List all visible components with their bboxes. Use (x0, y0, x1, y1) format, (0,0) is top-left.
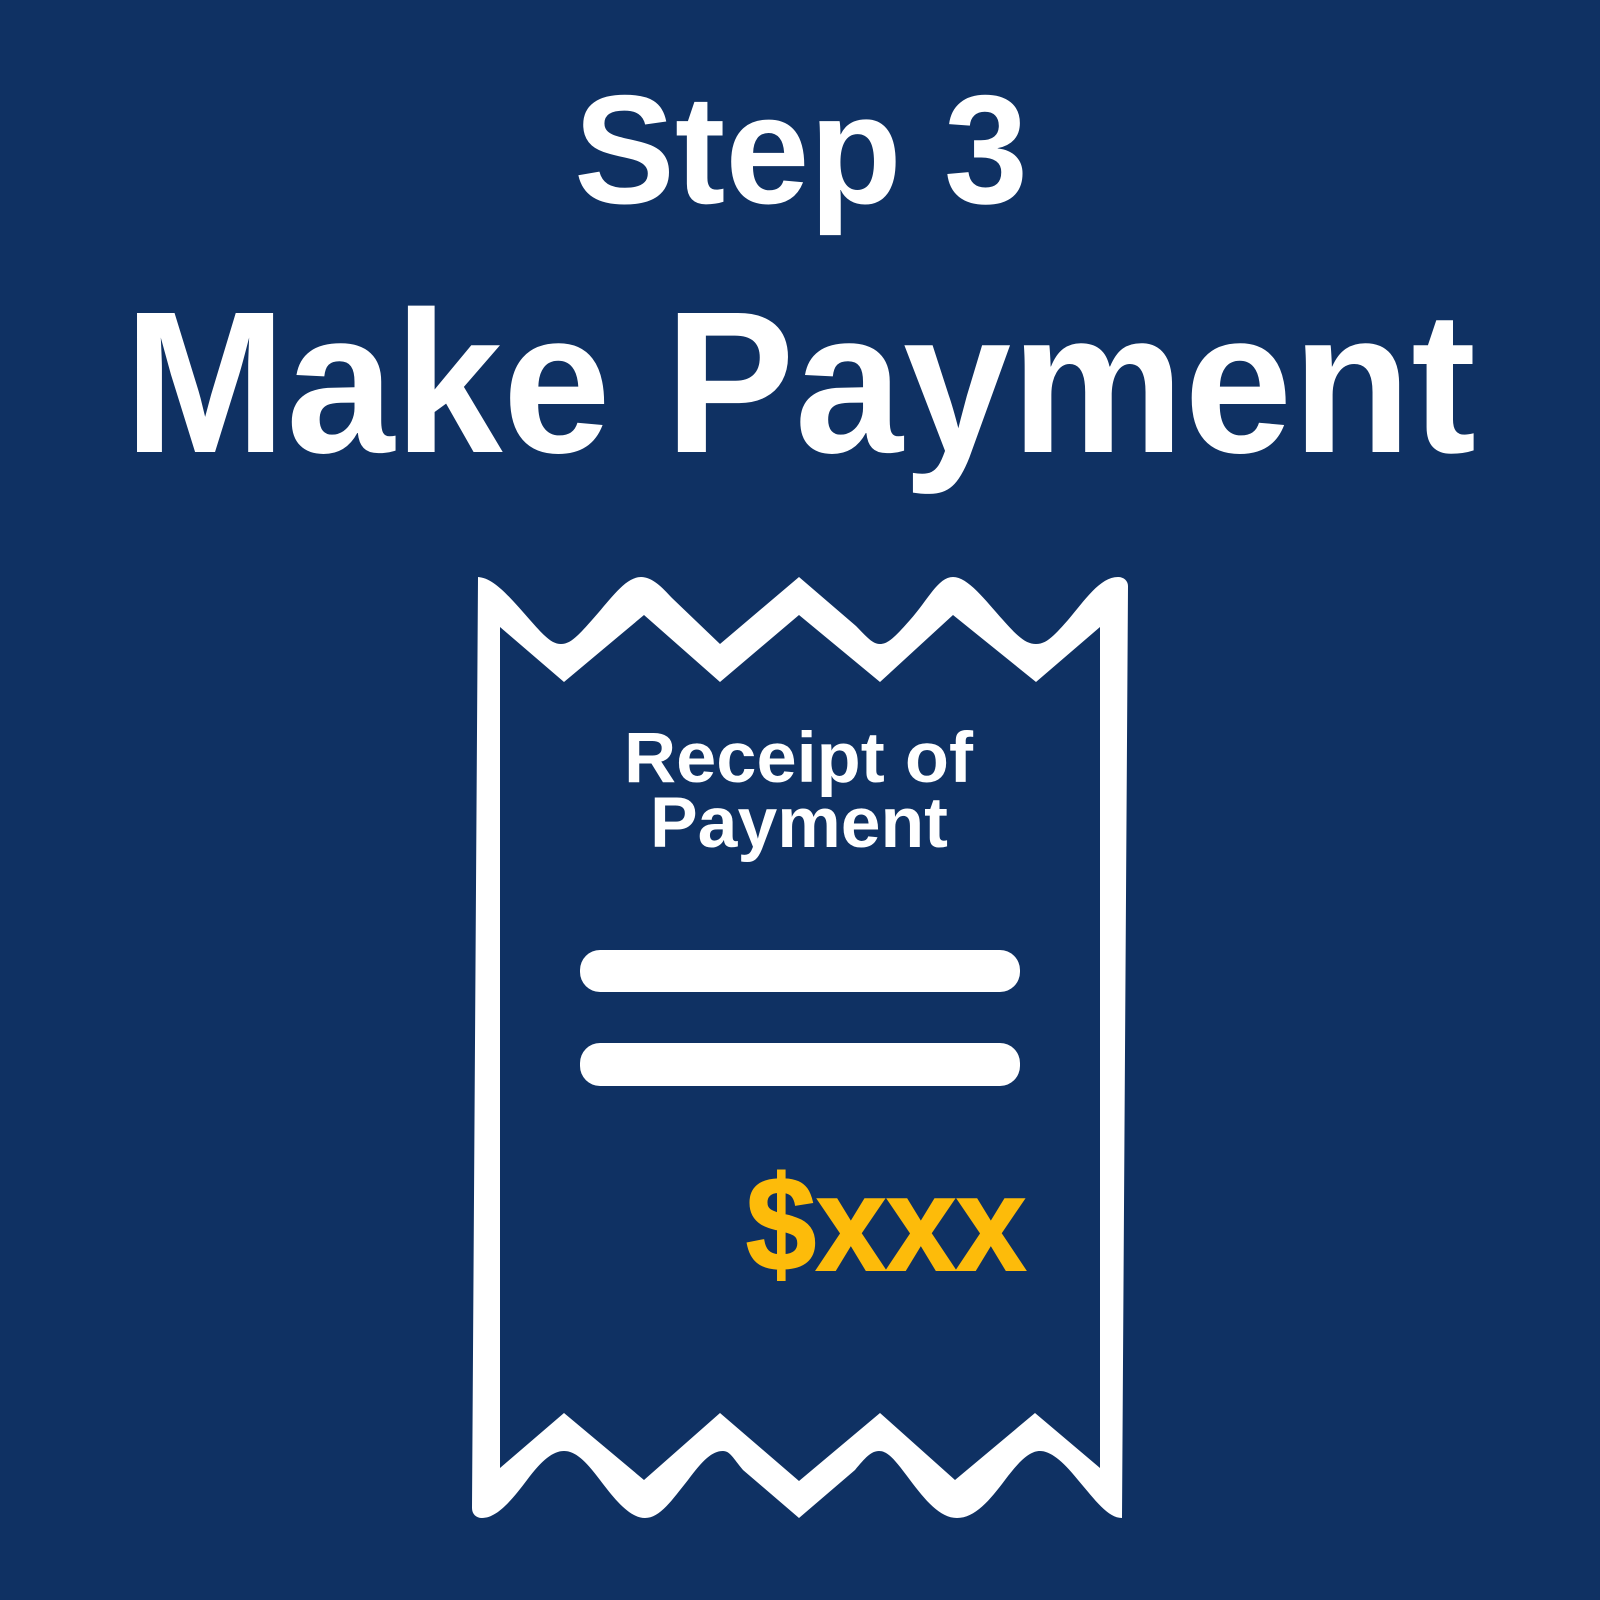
heading: make payment: Make Payment (124, 269, 1476, 495)
heading: step number: Step 3 (574, 63, 1028, 236)
receipt title (624, 719, 973, 863)
receipt title: Receipt of (624, 719, 973, 798)
icon: receipt outline (472, 577, 1128, 1518)
receipt title: Payment (650, 784, 948, 863)
receipt amount: $xxx (746, 1150, 1026, 1299)
receipt line items (580, 950, 1020, 1086)
